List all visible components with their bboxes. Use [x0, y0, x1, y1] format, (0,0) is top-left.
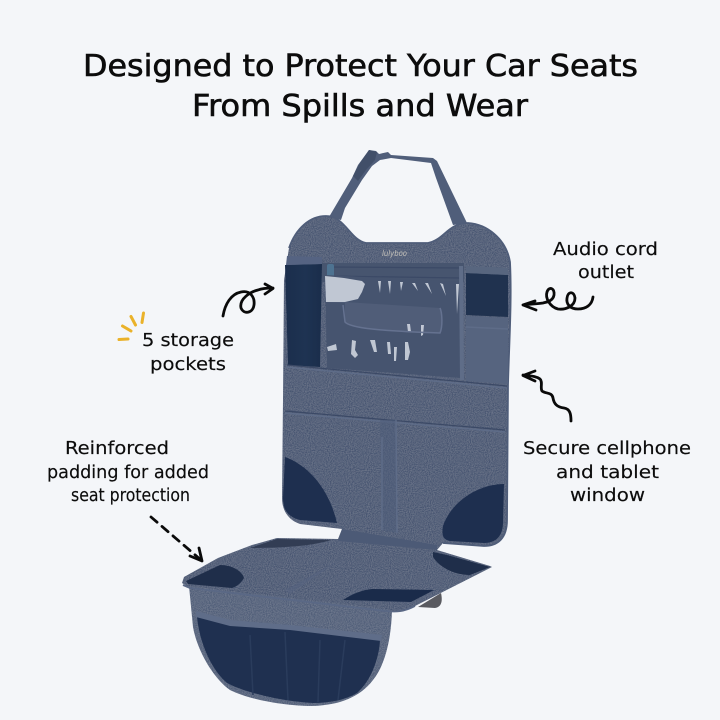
- headrest strap: [329, 150, 467, 225]
- window label: Secure cellphone: [523, 438, 691, 459]
- top right mesh pocket: [466, 273, 508, 317]
- pocket trim strip right: [466, 266, 508, 275]
- callout: audio cord outlet: [523, 239, 658, 310]
- seat front right patch: [343, 589, 434, 602]
- padding label: seat protection: [71, 485, 190, 506]
- storage label: pockets: [150, 354, 226, 375]
- callout: secure window: [523, 371, 691, 506]
- back panel: [182, 216, 511, 611]
- window label: [523, 438, 691, 506]
- rear anchor shadow: [418, 593, 442, 608]
- title: [83, 49, 638, 124]
- left mesh pocket: [285, 264, 322, 367]
- callout: storage pockets: [119, 284, 273, 375]
- seat left front patch: [186, 565, 244, 588]
- window right divider: [461, 266, 462, 380]
- padding label: padding for added: [47, 462, 209, 483]
- zipper band: [322, 263, 464, 282]
- seat front edge piping: [183, 585, 415, 611]
- arrow: curly to audio outlet: [523, 288, 593, 310]
- lower right fabric pocket: [466, 316, 508, 384]
- seat right patch: [433, 552, 490, 575]
- flap pocket trim: [196, 611, 382, 641]
- seat centre fold: [285, 560, 340, 594]
- callout: reinforced padding: [47, 438, 209, 561]
- storage label: [142, 330, 234, 375]
- arrow: looped to left pocket: [223, 284, 273, 316]
- padding label: Reinforced: [65, 438, 169, 459]
- title: Designed to Protect Your Car Seats: [83, 49, 638, 84]
- panel pocket seams: [285, 365, 507, 533]
- flap pleats: [250, 632, 345, 702]
- seat panel shading: [338, 529, 437, 550]
- pocket gather seam: [466, 327, 508, 329]
- pocket trim strip: [286, 256, 322, 265]
- storage label: 5 storage: [142, 330, 234, 351]
- back panel edge piping: [289, 216, 511, 546]
- audio label: Audio cord: [553, 239, 658, 260]
- flap mesh pocket: [197, 617, 380, 703]
- window label: and tablet: [556, 462, 659, 483]
- seat back left patch: [250, 539, 331, 548]
- audio label: outlet: [578, 262, 634, 283]
- left back corner patch: [283, 457, 337, 523]
- title: From Spills and Wear: [192, 89, 528, 124]
- clear phone and tablet window: [325, 275, 460, 378]
- right back corner patch: [442, 484, 504, 543]
- front flap: [183, 585, 415, 706]
- arrow: dashed to seat: [151, 517, 202, 561]
- window label: window: [570, 485, 645, 506]
- car seat protector product: [182, 150, 511, 706]
- brand logo: lulyboo: [382, 249, 407, 258]
- arrow: wavy to window: [523, 371, 571, 421]
- audio label: [553, 239, 658, 283]
- padding label: [47, 438, 209, 506]
- icon: yellow sparkle: [119, 313, 144, 340]
